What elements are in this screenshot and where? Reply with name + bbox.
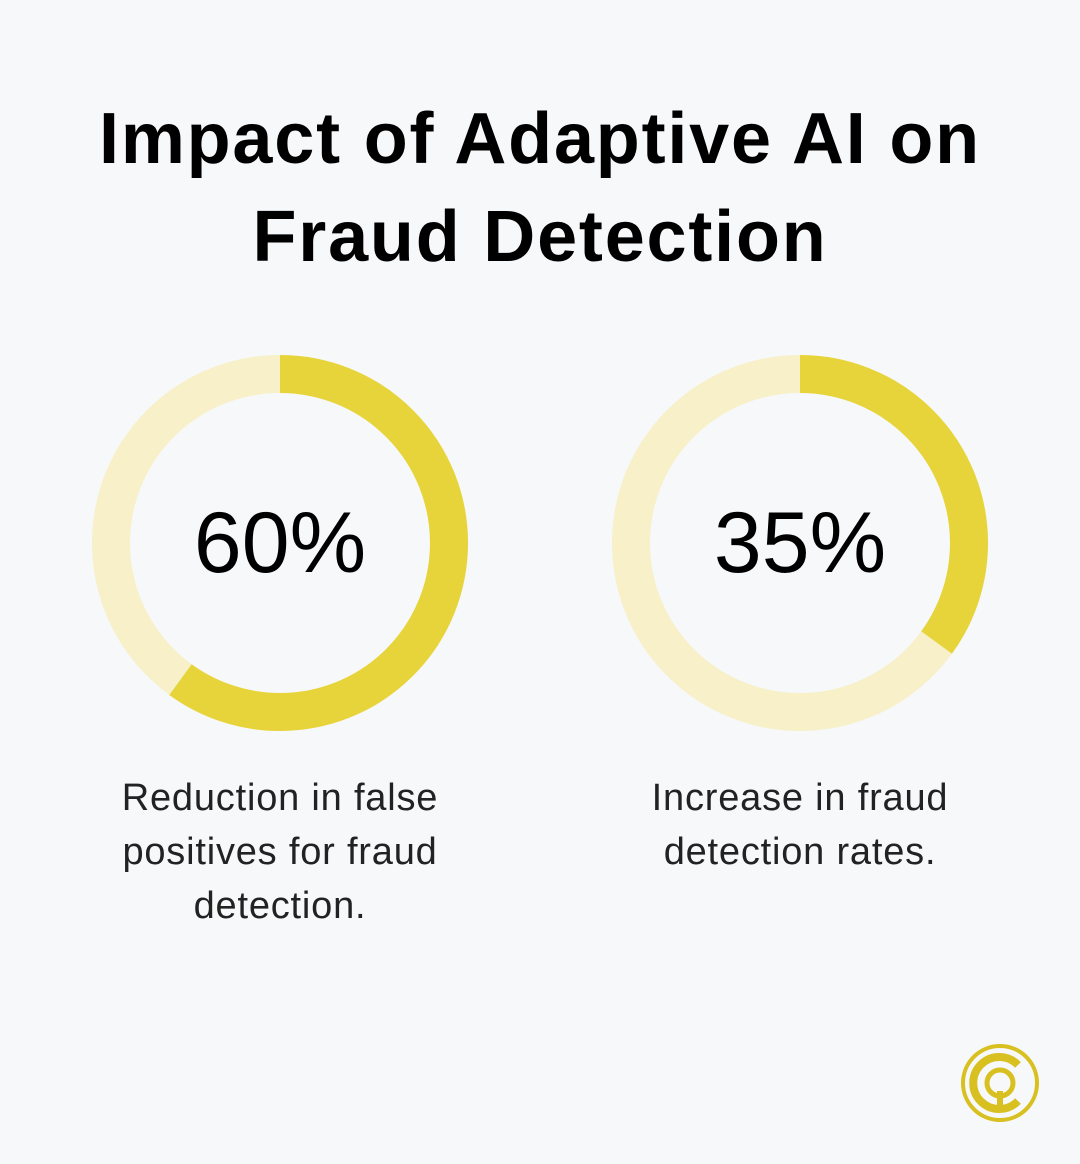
title: Fraud Detection	[252, 197, 828, 277]
title	[99, 99, 981, 277]
chart: donut 35%: 35%	[714, 495, 886, 591]
text: label 35%: Increase in fraud detection rates.	[652, 777, 948, 873]
chart: donut 60%	[92, 355, 468, 731]
title: Impact of Adaptive AI on	[99, 99, 981, 179]
text: label 60%: Reduction in false positives for fraud detection.	[122, 777, 438, 927]
icon: logo	[961, 1044, 1039, 1122]
chart: donut 35%	[612, 355, 988, 731]
chart: donut 60%: 60%	[194, 495, 366, 591]
